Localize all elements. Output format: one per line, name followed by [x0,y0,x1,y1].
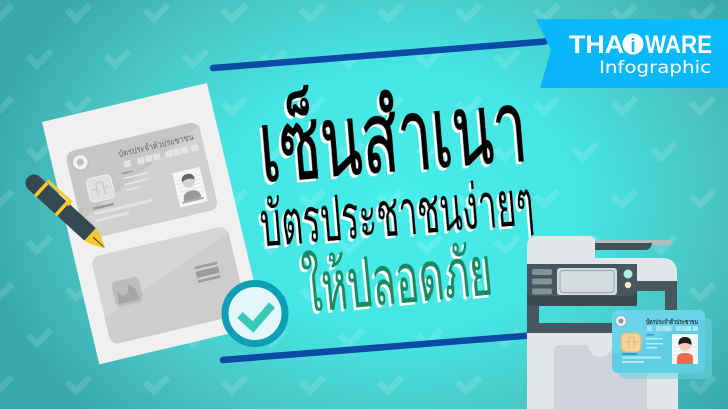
scanner tray [595,240,672,250]
ribbon: Thaiware Infographic logo [536,19,728,88]
emblem [71,153,90,172]
ID card front [65,121,219,240]
icon: fountain pen [22,169,113,255]
panel screen [557,268,617,295]
portrait photo [172,167,208,207]
logo i circle: i [630,36,636,57]
emblem [616,316,626,326]
ID card in colour [612,310,705,373]
id number squares [647,326,698,331]
text lines [622,334,663,363]
logo wordmark: THA [569,31,624,59]
photo placeholder [111,276,144,308]
card title: บัตรประจำตัวประชาชน [646,318,698,326]
copier frame [527,281,677,333]
chip [621,333,641,352]
chip [85,174,115,203]
magnetic stripes [194,262,221,283]
paper sheet [42,83,264,364]
photocopier [527,236,712,409]
copier body [527,333,678,409]
logo subtitle: Infographic [599,58,711,78]
title line 1: เซ็นสำเนา [254,66,531,204]
paper tray [554,345,647,409]
logo wordmark end: WARE [645,31,712,59]
document with ID card copy [42,83,264,364]
ID card shadow [619,318,712,379]
control panel [527,264,637,306]
ID card back [90,225,247,345]
portrait photo [672,334,698,364]
logo i circle [622,34,644,57]
card title: บัตรประจำตัวประชาชน [117,132,195,159]
copier top [527,236,677,285]
title [254,66,536,327]
bottom blue bar [223,336,530,360]
top blue bar [213,42,545,68]
icon: check badge [225,284,285,344]
text lines [87,167,156,222]
title line 3: ให้ปลอดภัย [299,232,496,327]
id number squares [123,144,199,168]
